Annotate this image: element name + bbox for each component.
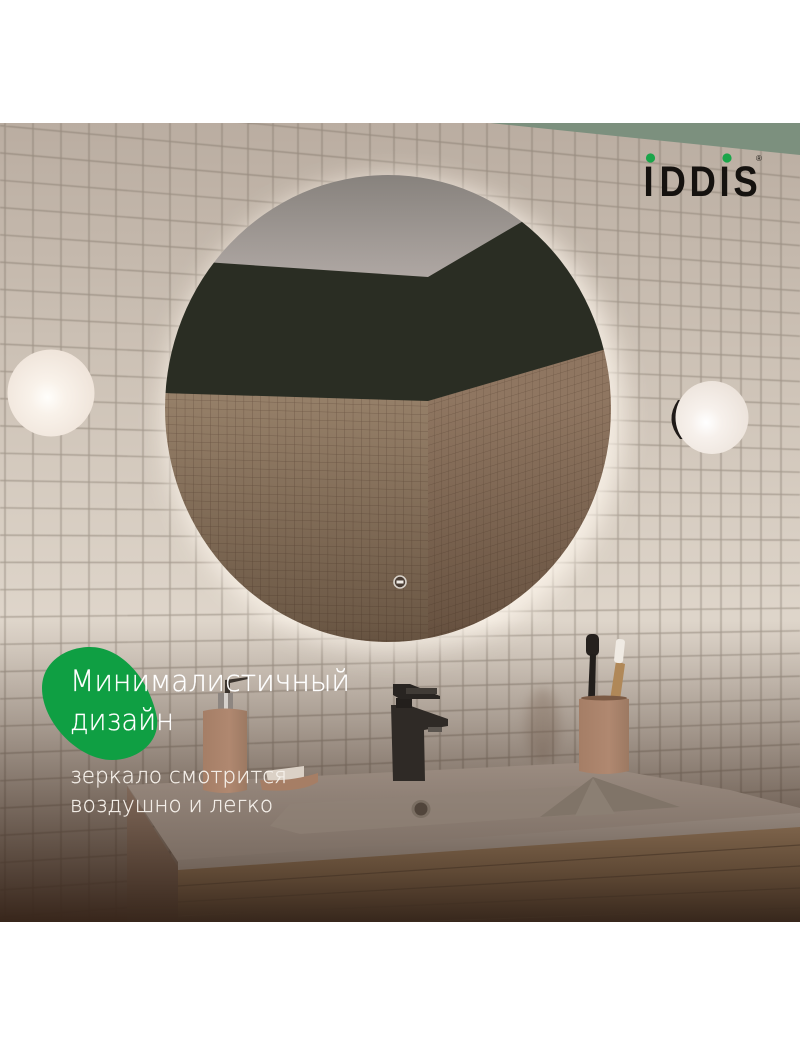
tile grout grid xyxy=(0,123,800,863)
toothbrush cup xyxy=(579,696,629,774)
wall lamp left xyxy=(8,350,94,436)
callout: minimalist design xyxy=(42,647,359,818)
toothbrush bamboo xyxy=(610,639,625,696)
vanity cabinet xyxy=(127,786,800,900)
toothbrush black xyxy=(586,634,599,700)
heading: дизайн xyxy=(70,703,174,737)
photo: bathroom scene xyxy=(0,98,800,930)
heading: Минималистичный xyxy=(70,664,350,698)
iDDiS logo xyxy=(643,153,762,206)
logo dots xyxy=(646,153,732,163)
mirror reflection: left tiled wall xyxy=(160,393,428,650)
mirror reflection: green wall xyxy=(160,220,620,405)
round mirror xyxy=(160,170,620,650)
tiled wall xyxy=(0,123,800,922)
black faucet xyxy=(391,684,448,781)
registered mark: ® xyxy=(756,154,762,163)
green painted wall strip xyxy=(490,123,800,155)
green blob xyxy=(42,647,157,760)
infographic canvas xyxy=(0,123,800,922)
drain xyxy=(412,800,430,818)
subheading: зеркало смотрится xyxy=(70,764,287,789)
logo wordmark: IDDIS xyxy=(643,158,758,206)
countertop with basin xyxy=(127,763,800,870)
wall lamp right xyxy=(671,381,748,454)
soap dish xyxy=(260,766,318,791)
mirror reflection: lower shading xyxy=(168,445,608,642)
subheading: воздушно и легко xyxy=(70,793,273,818)
mirror reflection: ceiling xyxy=(198,175,580,290)
soap dispenser xyxy=(203,677,248,793)
mirror reflection: right tiled wall xyxy=(428,345,620,650)
mirror backlight glow xyxy=(164,178,624,654)
mirror touch button xyxy=(394,576,406,588)
bottom dark gradient overlay xyxy=(0,620,800,922)
tooth cup shadow on wall xyxy=(527,687,559,763)
